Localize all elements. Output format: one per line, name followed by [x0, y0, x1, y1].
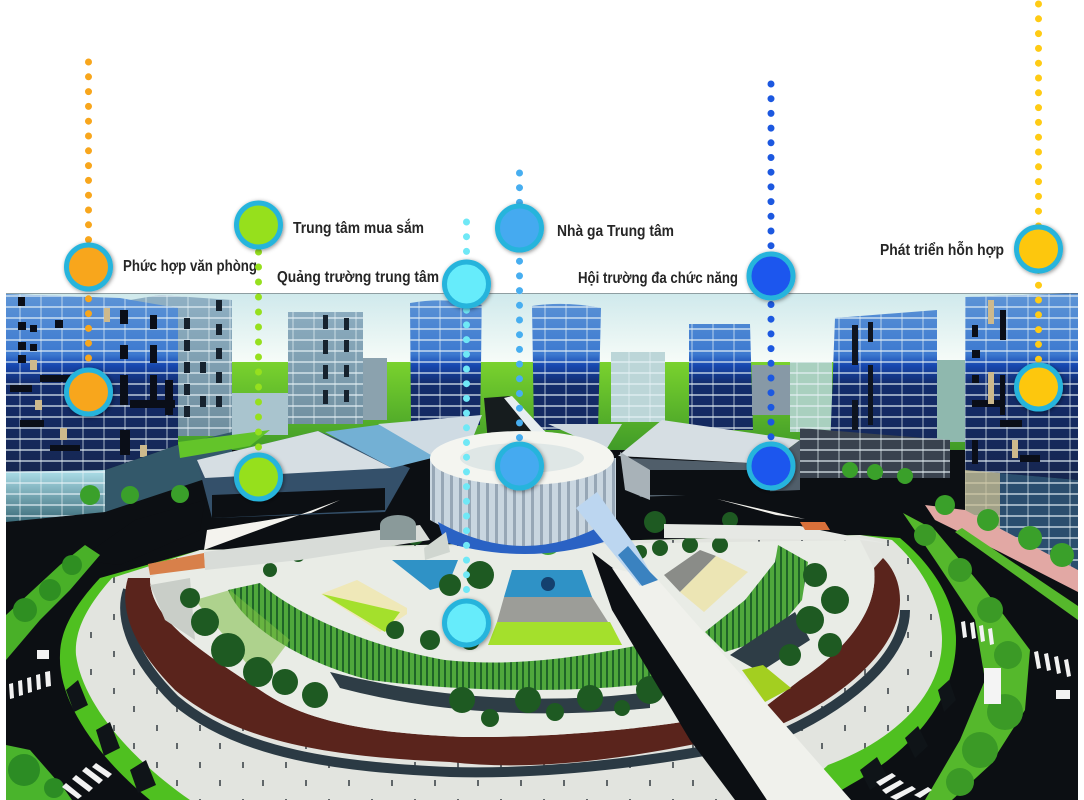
marker: office complex	[66, 62, 257, 414]
marker: central square	[277, 222, 488, 645]
upper road and streetside trees	[78, 462, 1078, 620]
central station drum	[424, 396, 616, 560]
marker: central station	[498, 173, 674, 488]
tree belts at the edges	[6, 513, 1030, 800]
plaza entry canopies and walkway	[148, 499, 890, 575]
marker: multipurpose hall	[578, 84, 793, 488]
marker: shopping mall	[236, 203, 424, 499]
palms	[180, 511, 849, 727]
label: Quảng trường trung tâm	[277, 269, 439, 286]
right tower	[965, 293, 1078, 570]
circular plaza outer ring	[60, 535, 956, 800]
left tower	[6, 294, 270, 522]
label: Nhà ga Trung tâm	[557, 223, 674, 240]
label: Phức hợp văn phòng	[123, 258, 257, 275]
label: Hội trường đa chức năng	[578, 270, 738, 287]
road markings	[9, 621, 1071, 800]
elevated rail viaduct	[576, 492, 851, 800]
plaza gardens and trellises	[180, 511, 849, 727]
background towers	[130, 295, 967, 478]
marker: mixed-use development	[880, 4, 1060, 409]
aerial illustration of the urban complex	[6, 293, 1078, 800]
retail halls	[197, 415, 800, 518]
central plaza with brown planting ring	[125, 540, 905, 772]
label: Phát triển hỗn hợp	[880, 240, 1004, 259]
label: Trung tâm mua sắm	[293, 218, 424, 237]
